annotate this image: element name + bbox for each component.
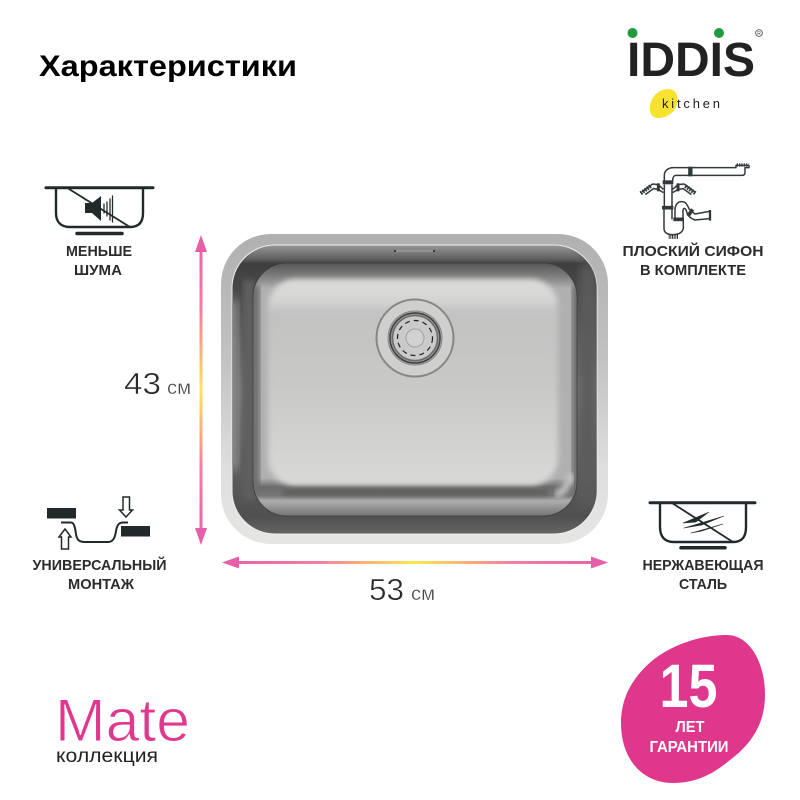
- label: СТАЛЬ: [679, 576, 727, 593]
- bowl wall: [232, 245, 597, 534]
- label: УНИВЕРСАЛЬНЫЙ: [32, 556, 166, 574]
- lower dark band: [282, 488, 548, 496]
- warranty badge: ГАРАНТИИ: [650, 739, 728, 756]
- rim: [221, 234, 608, 544]
- dimension: width arrow: [222, 556, 608, 568]
- label: МЕНЬШЕ: [66, 243, 132, 260]
- label: [622, 242, 764, 279]
- label: ПЛОСКИЙ СИФОН: [622, 242, 764, 260]
- sink photo: [221, 234, 608, 544]
- label: [32, 556, 166, 593]
- collection name: коллекция: [56, 746, 158, 767]
- label: НЕРЖАВЕЮЩАЯ: [642, 557, 764, 574]
- logo: IDDIS kitchen: IDDIS: [627, 34, 755, 87]
- icon: siphon: [641, 165, 749, 237]
- drain: [376, 300, 454, 376]
- icon: steel sink: [650, 503, 755, 548]
- label: [66, 243, 132, 279]
- dimension label: 43 cm: [124, 366, 191, 401]
- warranty badge: ЛЕТ: [676, 719, 705, 736]
- corner glint: [556, 474, 572, 496]
- logo: IDDIS kitchen: kitchen: [662, 96, 720, 111]
- icon: quiet sink: [46, 188, 153, 234]
- floor: [268, 279, 558, 486]
- feature: universal mounting: [32, 497, 166, 593]
- bevel edge: [253, 263, 577, 516]
- overflow slot: [394, 250, 435, 252]
- rim highlight: [232, 245, 597, 534]
- label: ШУМА: [74, 262, 122, 279]
- label: [642, 557, 764, 593]
- feature: less noise: [46, 188, 153, 279]
- title: Характеристики: [39, 50, 297, 83]
- collection name: Mate: [55, 687, 190, 754]
- feature: stainless steel: [642, 503, 764, 593]
- logo: IDDIS kitchen: R: [757, 31, 761, 37]
- icon: mounting diagram: [47, 497, 150, 549]
- logo: IDDIS kitchen: [627, 28, 762, 118]
- dimension label: 43 cm: см: [167, 378, 191, 399]
- dimension label: 53 cm: [369, 572, 435, 607]
- dimension label: 43 cm: 43: [124, 366, 161, 401]
- warranty badge: 15: [660, 652, 718, 720]
- label: МОНТАЖ: [68, 576, 134, 593]
- dimension label: 53 cm: см: [411, 584, 435, 605]
- bevel ring: [253, 263, 577, 516]
- dimension label: 53 cm: 53: [369, 572, 404, 607]
- warranty badge: [621, 635, 765, 783]
- dimension: height arrow: [195, 235, 207, 545]
- bevel shading: [250, 279, 580, 496]
- feature: flat siphon: [622, 165, 764, 279]
- label: В КОМПЛЕКТЕ: [640, 262, 746, 279]
- wall side shading: [226, 265, 596, 505]
